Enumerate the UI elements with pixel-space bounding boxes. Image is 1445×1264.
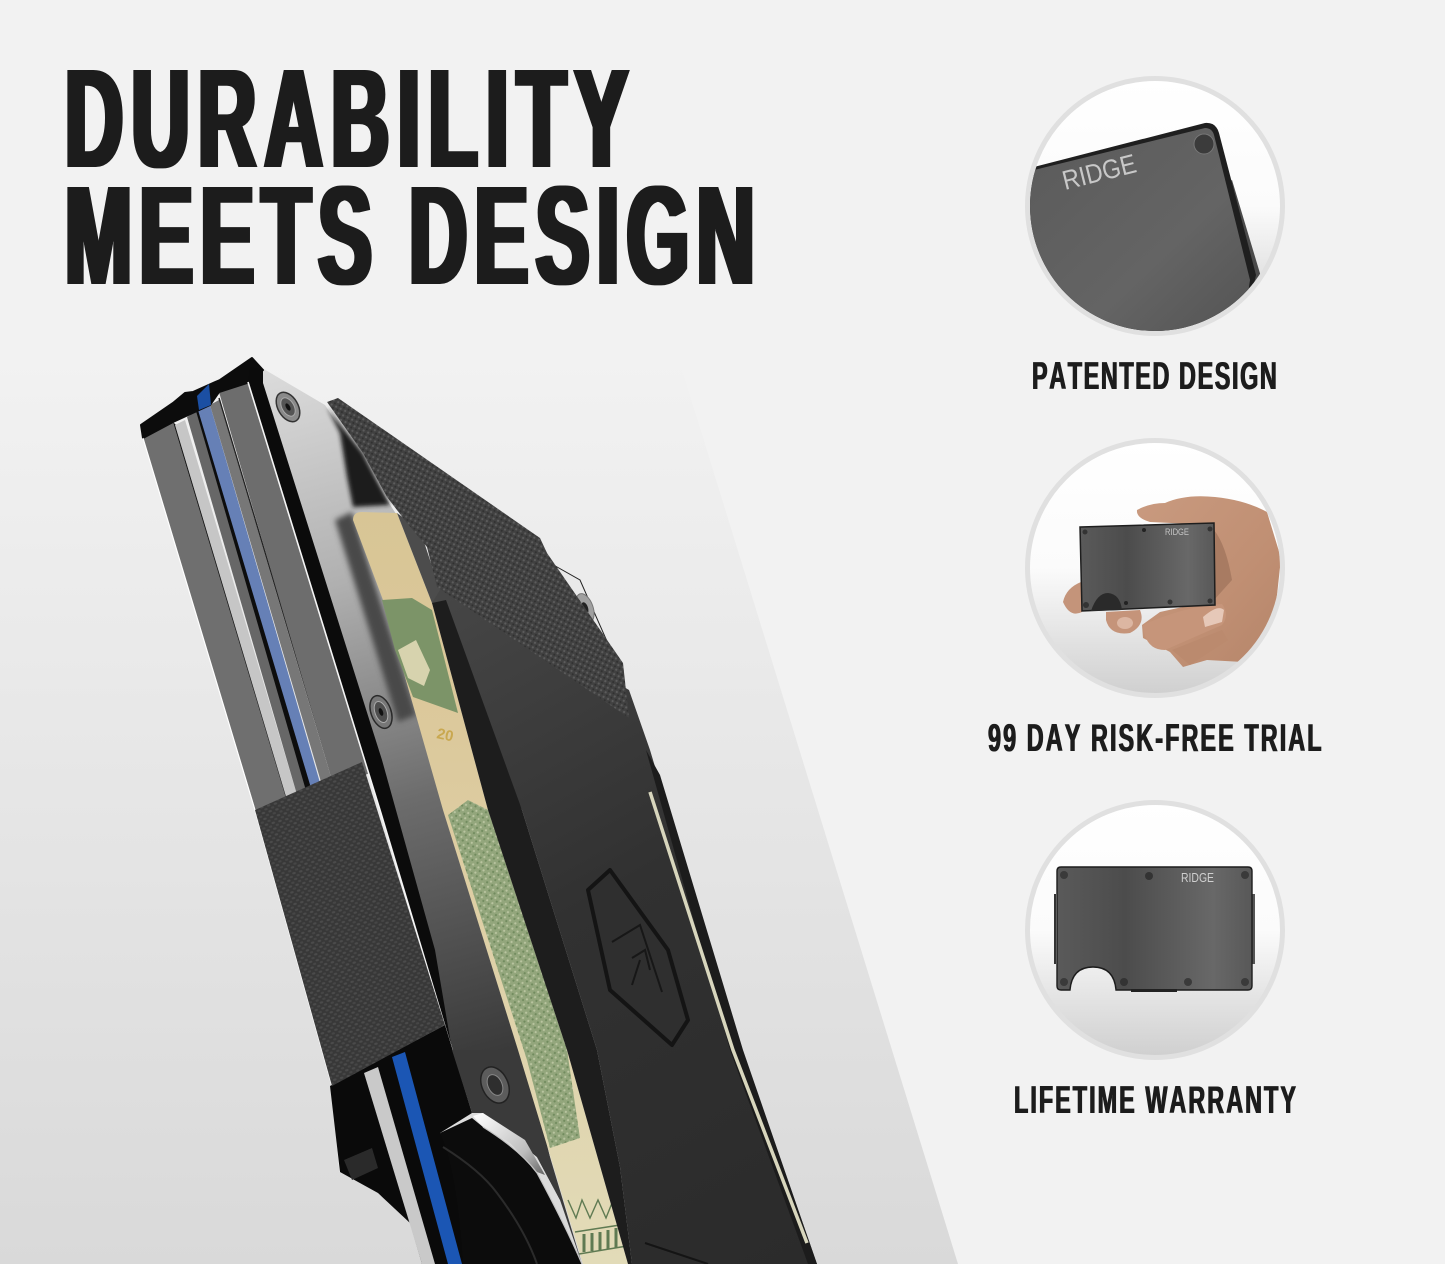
wallet: stitched strap edge <box>432 600 632 1264</box>
wallet: card slot groove <box>335 512 416 722</box>
wallet illustration <box>141 358 817 1264</box>
small wallet card <box>1080 523 1215 611</box>
wallet: plate lower <box>452 1050 582 1264</box>
wallet: bill print white <box>398 640 430 686</box>
wallet: leather dark outer edge <box>646 750 817 1264</box>
wallet: bill text: 20 <box>435 725 455 745</box>
wallet: black top cap <box>141 358 263 438</box>
wallet: badge R mark <box>612 925 662 992</box>
wallet: grey strip <box>187 410 310 805</box>
ridge logo: RIDGE <box>1165 527 1189 537</box>
wallet: right plate corner <box>550 563 617 680</box>
hand holding wallet <box>1063 496 1281 667</box>
wallet: clip inner curve <box>443 1147 537 1264</box>
feature: 99 day risk-free trial <box>988 440 1322 759</box>
wallet: side face large <box>219 382 370 787</box>
wallet: band shadow on plate <box>327 407 390 507</box>
wallet: blue cap <box>197 384 211 410</box>
background light beam <box>0 350 958 1264</box>
ridge logo: RIDGE <box>1181 870 1214 885</box>
wallet: strap badge <box>588 870 688 1045</box>
screw bottom <box>475 1062 515 1108</box>
wallet: left white edge <box>143 438 340 1172</box>
wallet: chrome highlight <box>473 1113 545 1175</box>
title: MEETS DESIGN <box>65 157 755 315</box>
wallet close-up <box>1030 122 1260 331</box>
screw middle <box>366 693 396 731</box>
wallet: thin line <box>219 398 335 787</box>
wallet: elastic band top <box>327 398 629 718</box>
wallet: blue strip upper <box>198 405 323 798</box>
wallet: cash bill <box>353 512 628 1264</box>
wallet: bill print upper <box>382 598 458 713</box>
wallet: silver strip <box>175 420 300 810</box>
feature: patented design <box>1020 78 1282 397</box>
wallet: clip white edge <box>483 1127 582 1264</box>
wallet: white edge highlight <box>248 382 472 1113</box>
feature: lifetime warranty <box>1014 802 1296 1121</box>
wallet: bill green texture <box>448 800 580 1148</box>
wallet: side dark line <box>173 422 294 808</box>
wallet: elastic band lower <box>255 762 445 1086</box>
wallet: side face grey <box>143 422 290 812</box>
wallet: blue strip lower <box>392 1052 462 1264</box>
circle ring <box>1028 78 1282 334</box>
circle ring <box>1028 440 1282 696</box>
wallet: front plate <box>262 368 560 1200</box>
screw top <box>271 388 305 426</box>
ridge logo: RIDGE <box>1059 149 1139 196</box>
screw right <box>572 591 598 625</box>
wallet: grey strip right <box>210 400 334 792</box>
wallet: black edge strip <box>248 367 452 1050</box>
wallet: black separator <box>196 410 315 801</box>
wallet: black money clip arc <box>440 1118 582 1264</box>
wallet: silver strip lower <box>364 1067 435 1264</box>
wallet: lower black block <box>330 1025 520 1264</box>
title <box>65 40 755 315</box>
title: DURABILITY <box>65 40 628 198</box>
wallet: band inner tab <box>397 513 440 603</box>
wallet front view <box>1054 867 1255 992</box>
feature label: PATENTED DESIGN <box>1032 354 1277 397</box>
wallet: leather strap <box>428 572 817 1264</box>
wallet: cream card edge <box>650 792 807 1243</box>
wallet: lower block sheen <box>344 1148 378 1180</box>
feature label: 99 DAY RISK-FREE TRIAL <box>988 716 1322 759</box>
wallet: strap crease <box>645 1243 708 1264</box>
wallet: bill engraving <box>568 1198 627 1254</box>
circle ring <box>1028 802 1282 1058</box>
feature label: LIFETIME WARRANTY <box>1014 1078 1296 1121</box>
